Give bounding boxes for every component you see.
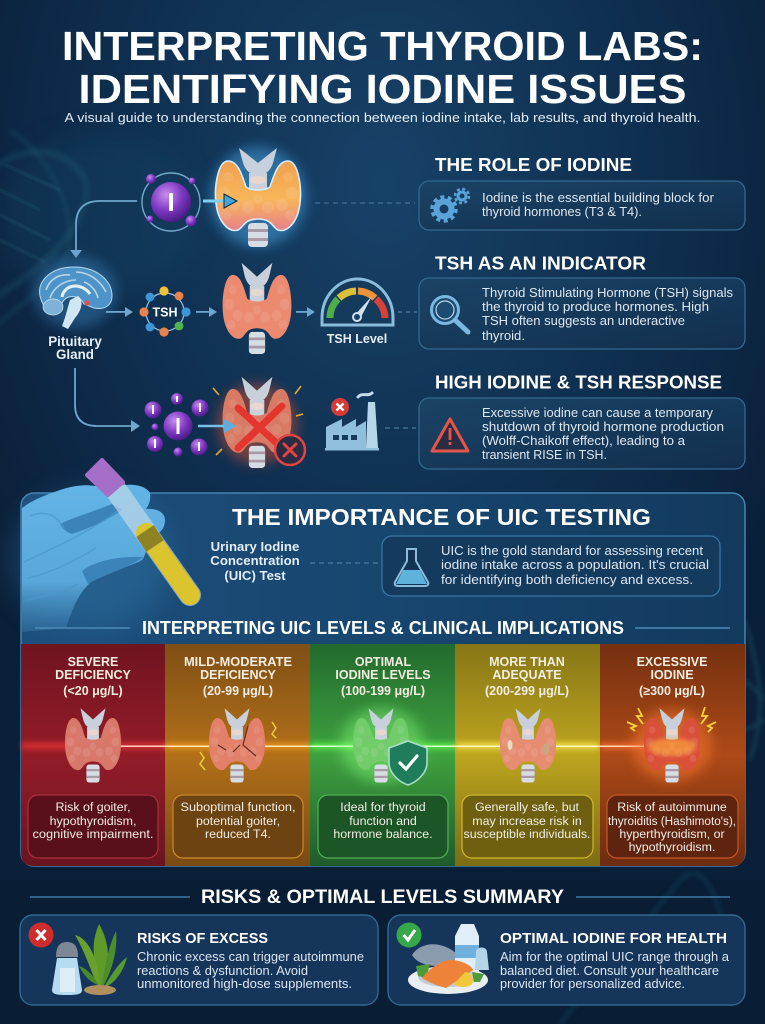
label: UIC test: (UIC) Test — [224, 568, 286, 583]
label: excessive range — [637, 655, 707, 698]
column: excessive iodine — [600, 644, 745, 866]
text: role of iodine: Iodine is the essential building block for — [482, 190, 715, 205]
text: high iodine response: Excessive iodine can cause a temporary — [482, 405, 713, 420]
text: role of iodine — [482, 190, 715, 219]
text: risks of excess: unmonitored high-dose supplements. — [137, 977, 352, 991]
callout: optimal benefits — [318, 795, 448, 858]
callout: severe risks — [28, 795, 158, 858]
column: more than adequate — [455, 644, 600, 866]
label: more than adequate range: ADEQUATE — [492, 668, 562, 682]
callout: excessive risks: Risk of autoimmune — [617, 800, 727, 814]
arrow: iodine to shutdown — [198, 419, 236, 433]
icon: gears — [432, 189, 469, 221]
icon: shrunken thyroid — [65, 708, 121, 782]
text: role of iodine: thyroid hormones (T3 & T4). — [482, 204, 642, 219]
callout: more than adequate note: may increase risk in — [472, 814, 582, 828]
label: severe deficiency range: (<20 μg/L) — [63, 684, 123, 698]
icon: TSH molecule ring — [139, 286, 191, 337]
icon: magnifier — [432, 296, 468, 332]
heading: risks of excess: RISKS OF EXCESS — [137, 930, 268, 947]
panel: TSH indicator — [419, 278, 745, 349]
label: optimal range: IODINE LEVELS — [335, 668, 431, 682]
icon: healthy green thyroid with shield — [340, 707, 427, 785]
callout: excessive risks: thyroiditis (Hashimoto's), — [608, 814, 736, 828]
text: high iodine response: transient RISE in TSH. — [482, 447, 607, 462]
arrow: thyroid to gauge — [296, 307, 315, 317]
heading: interpreting UIC levels: INTERPRETING UIC LEVELS & CLINICAL IMPLICATIONS — [142, 618, 624, 638]
label: more than adequate range: (200-299 μg/L) — [485, 684, 569, 698]
text: high iodine response: (Wolff-Chaikoff effect), leading to a — [482, 433, 686, 448]
icon: brain — [33, 256, 117, 329]
connector: gauge dashed — [398, 311, 417, 313]
label: pituitary gland: Gland — [56, 347, 94, 362]
label: UIC test: Concentration — [210, 553, 300, 568]
text: high iodine response: shutdown of thyroid hormone production — [482, 419, 724, 434]
callout: excessive risks: hypothyroidism. — [629, 840, 715, 854]
icon: healthy thyroid with glow — [210, 147, 306, 247]
text: UIC gold standard: iodine intake across a population. It's crucial — [441, 557, 709, 572]
icon: inflamed thyroid — [627, 707, 716, 782]
icon: green check badge — [396, 922, 422, 948]
text: risks of excess: reactions & dysfunction. Avoid — [137, 964, 308, 978]
icon: flask — [395, 549, 428, 586]
label: mild-moderate range: (20-99 μg/L) — [203, 684, 273, 698]
column: mild-moderate deficiency — [165, 644, 310, 866]
text: optimal iodine for health: Aim for the optimal UIC range through a — [500, 950, 729, 964]
text: risks of excess: Chronic excess can trigger autoimmune — [137, 950, 364, 964]
label: UIC test — [210, 539, 300, 583]
title: IDENTIFYING IODINE ISSUES — [78, 66, 686, 112]
callout: mild-moderate risks: Suboptimal function, — [180, 800, 296, 814]
callout: UIC gold standard — [382, 536, 720, 596]
heading: risks and optimal levels summary: RISKS & OPTIMAL LEVELS SUMMARY — [201, 887, 564, 908]
heading: TSH as an indicator: TSH AS AN INDICATOR — [435, 254, 646, 274]
panel: risks of excess — [20, 915, 378, 1005]
label: optimal range: (100-199 μg/L) — [341, 684, 425, 698]
callout: more than adequate note: Generally safe, but — [475, 800, 580, 814]
panel: high iodine response — [419, 398, 745, 469]
illustration: urine test tube — [87, 460, 190, 595]
heading: high iodine and TSH response: HIGH IODINE & TSH RESPONSE — [435, 372, 722, 392]
text: TSH indicator: thyroid. — [482, 328, 525, 343]
text: high iodine response — [482, 405, 724, 462]
label: TSH level: TSH Level — [327, 332, 387, 346]
callout: mild-moderate risks — [173, 795, 303, 858]
diagram: iodine flow connector — [70, 201, 140, 432]
icon: plate with salmon — [408, 960, 488, 994]
icon: thyroid shutdown with red X — [213, 377, 305, 468]
label: pituitary gland — [48, 334, 102, 362]
heading: importance of UIC testing: THE IMPORTANCE OF UIC TESTING — [232, 504, 651, 530]
callout: mild-moderate risks: potential goiter, — [196, 814, 280, 828]
callout: severe risks: cognitive impairment. — [32, 827, 154, 841]
icon: factory stopped — [325, 393, 379, 450]
text: optimal iodine for health: balanced diet. Consult your healthcare — [500, 964, 719, 978]
label: severe deficiency range: SEVERE — [68, 655, 118, 669]
icon: TSH level gauge — [322, 279, 393, 325]
callout: excessive risks: hyperthyroidism, or — [619, 827, 725, 841]
title: INTERPRETING THYROID LABS: — [62, 23, 703, 69]
callout: optimal benefits: function and — [349, 814, 417, 828]
callout: excessive risks — [607, 795, 738, 858]
subtitle: A visual guide to understanding the connection between iodine intake, lab results, and thyroid health. — [64, 110, 700, 125]
arrow: pituitary to TSH — [106, 307, 133, 317]
text: UIC gold standard — [441, 543, 709, 587]
icon: nodular thyroid — [500, 708, 556, 782]
icon: fish — [412, 944, 458, 966]
label: optimal range: OPTIMAL — [355, 655, 411, 669]
icon: salt shaker — [52, 942, 82, 995]
callout: optimal benefits: hormone balance. — [333, 827, 433, 841]
panel: role of iodine — [419, 181, 745, 230]
heading: the role of iodine: THE ROLE OF IODINE — [435, 155, 632, 175]
label: mild-moderate range: MILD-MODERATE — [184, 655, 292, 669]
label: pituitary gland: Pituitary — [48, 334, 102, 349]
callout: severe risks: hypothyroidism, — [50, 814, 136, 828]
arrow: TSH to thyroid — [196, 307, 217, 317]
callout: more than adequate note: susceptible individuals. — [464, 827, 590, 841]
text: TSH indicator: the thyroid to produce hormones. High — [482, 299, 709, 314]
heading: optimal iodine for health: OPTIMAL IODINE FOR HEALTH — [500, 930, 727, 947]
title — [62, 23, 703, 112]
icon: TSH molecule ring: TSH — [152, 306, 178, 320]
icon: cracked thyroid — [200, 708, 276, 782]
icon: red X badge — [28, 922, 54, 948]
icon: warning triangle — [432, 419, 468, 451]
label: severe deficiency range — [55, 655, 132, 698]
icon: excess iodine cluster — [144, 393, 208, 456]
connector: role of iodine dashed — [315, 202, 415, 204]
callout: mild-moderate risks: reduced T4. — [205, 827, 271, 841]
text: UIC gold standard: UIC is the gold standard for assessing recent — [441, 543, 703, 558]
icon: thyroid normal — [223, 263, 291, 354]
text: UIC gold standard: for identifying both deficiency and excess. — [441, 572, 693, 587]
callout: severe risks: Risk of goiter, — [55, 800, 131, 814]
callout: optimal benefits: Ideal for thyroid — [340, 800, 426, 814]
text: risks of excess — [137, 950, 364, 991]
arrow: iodine to thyroid — [203, 194, 237, 208]
callout: more than adequate note — [462, 795, 593, 858]
label: UIC test: Urinary Iodine — [211, 539, 299, 554]
label: excessive range: (≥300 μg/L) — [639, 684, 705, 698]
text: TSH indicator — [482, 285, 733, 343]
panel: importance of UIC testing — [10, 460, 745, 866]
label: mild-moderate range: DEFICIENCY — [200, 668, 277, 682]
label: mild-moderate range — [184, 655, 292, 698]
illustration: gloved hand — [10, 485, 170, 632]
text: optimal iodine for health — [500, 950, 729, 991]
label: optimal range — [335, 655, 431, 698]
icon: milk carton — [455, 924, 489, 971]
column: severe deficiency — [21, 644, 165, 866]
text: optimal iodine for health: provider for personalized advice. — [500, 977, 685, 991]
connector: high iodine dashed — [385, 427, 416, 429]
column: optimal iodine levels — [310, 644, 455, 866]
panel: optimal iodine for health — [388, 915, 745, 1005]
icon: seaweed — [75, 924, 127, 995]
label: more than adequate range — [485, 655, 569, 698]
label: more than adequate range: MORE THAN — [489, 655, 565, 669]
label: excessive range: EXCESSIVE — [637, 655, 707, 669]
icon: iodine atom — [142, 173, 200, 231]
label: severe deficiency range: DEFICIENCY — [55, 668, 132, 682]
text: TSH indicator: TSH often suggests an underactive — [482, 313, 685, 328]
text: TSH indicator: Thyroid Stimulating Hormone (TSH) signals — [482, 285, 733, 300]
label: excessive range: IODINE — [650, 668, 694, 682]
